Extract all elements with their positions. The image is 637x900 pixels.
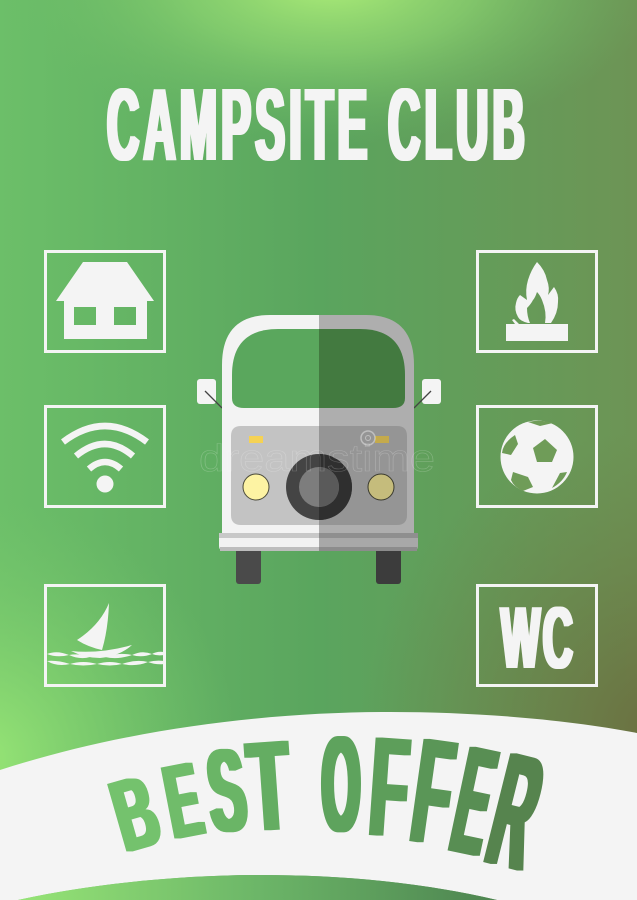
title: CAMPSITE CLUB <box>107 67 529 182</box>
banner headline: BEST OFFER: T <box>244 713 294 859</box>
mirrors <box>197 379 441 408</box>
banner lower green curve <box>18 875 497 900</box>
windshield <box>232 329 405 408</box>
icon: WC sign <box>478 586 596 687</box>
wheels <box>236 548 401 584</box>
icon: football <box>478 406 596 506</box>
bumper <box>219 533 418 551</box>
watermark: dreamstime <box>199 438 435 480</box>
icon: sailboat <box>46 586 164 686</box>
front panel <box>231 426 407 525</box>
banner headline: BEST OFFER: F <box>366 707 413 868</box>
banner headline: BEST OFFER: B <box>101 754 170 874</box>
banner headline: BEST OFFER: S <box>202 724 252 858</box>
banner headline: BEST OFFER <box>101 707 557 900</box>
centre badge <box>286 454 352 520</box>
indicators <box>249 436 389 443</box>
icon: campfire <box>478 252 596 352</box>
icon: house <box>46 252 164 352</box>
banner: white ribbon <box>0 712 637 900</box>
icon: WC sign: WC <box>501 589 576 687</box>
banner headline: BEST OFFER: E <box>156 741 210 862</box>
icon: wifi <box>46 406 164 506</box>
headlights <box>243 474 394 500</box>
banner headline: BEST OFFER: E <box>440 715 507 889</box>
banner headline: BEST OFFER: F <box>404 707 462 878</box>
banner headline: BEST OFFER: O <box>322 707 360 860</box>
van body <box>222 315 414 533</box>
banner headline: BEST OFFER: R <box>474 718 557 900</box>
camper van <box>197 315 441 584</box>
